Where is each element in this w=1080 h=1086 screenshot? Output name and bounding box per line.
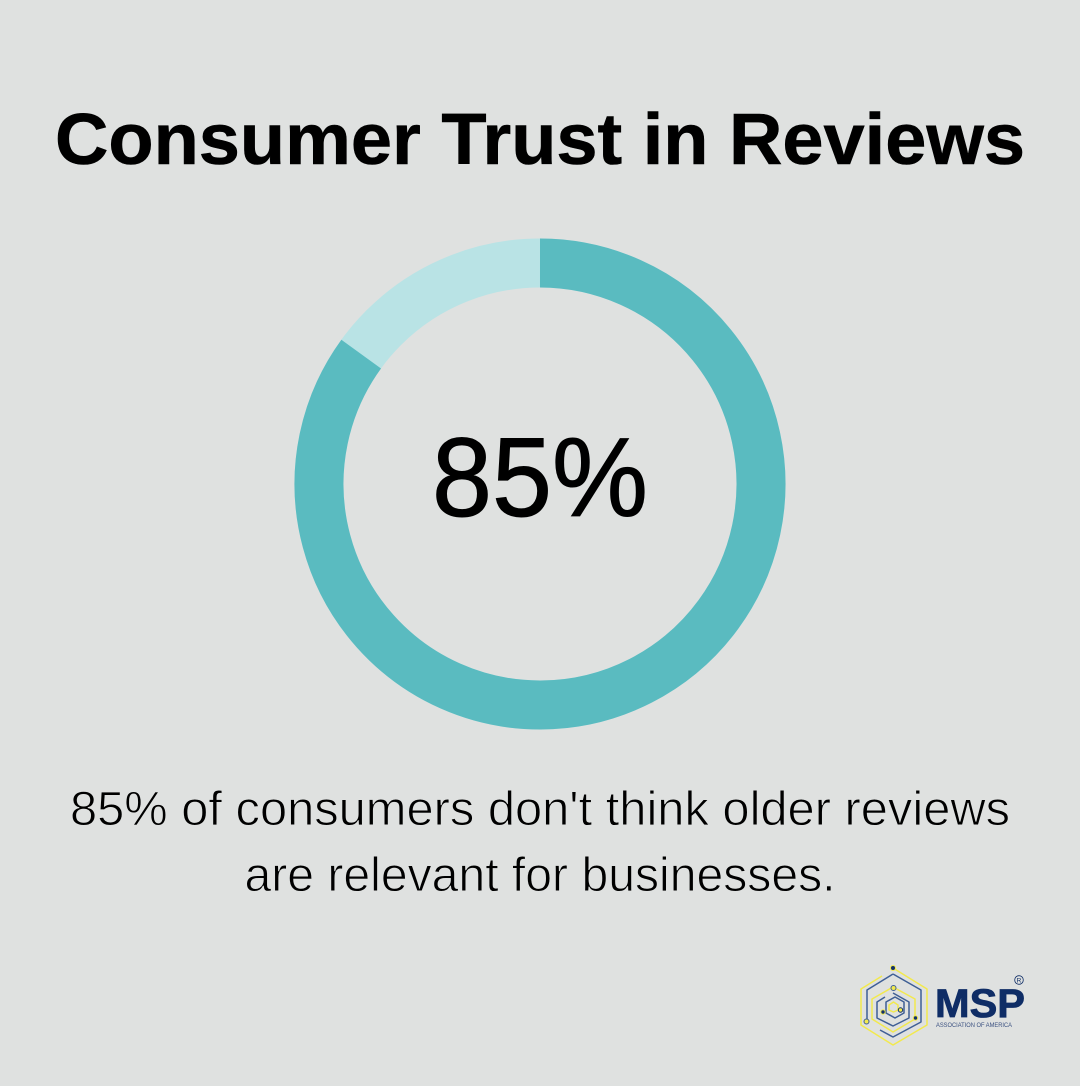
description text: are relevant for businesses. xyxy=(244,849,836,902)
title: Consumer Trust in Reviews xyxy=(55,100,1025,180)
registered mark xyxy=(1015,976,1023,984)
logo: MSP Association of America xyxy=(861,966,1025,1045)
wordmark: MSP xyxy=(935,982,1025,1026)
center value: 85% xyxy=(432,415,648,540)
description text: 85% of consumers don't think older reviews xyxy=(70,783,1010,836)
registered mark: R xyxy=(1017,978,1022,984)
description text xyxy=(70,783,1010,902)
tagline: ASSOCIATION OF AMERICA xyxy=(936,1022,1013,1029)
donut chart: 85% xyxy=(319,263,761,705)
icon: nested hexagons xyxy=(861,966,927,1045)
